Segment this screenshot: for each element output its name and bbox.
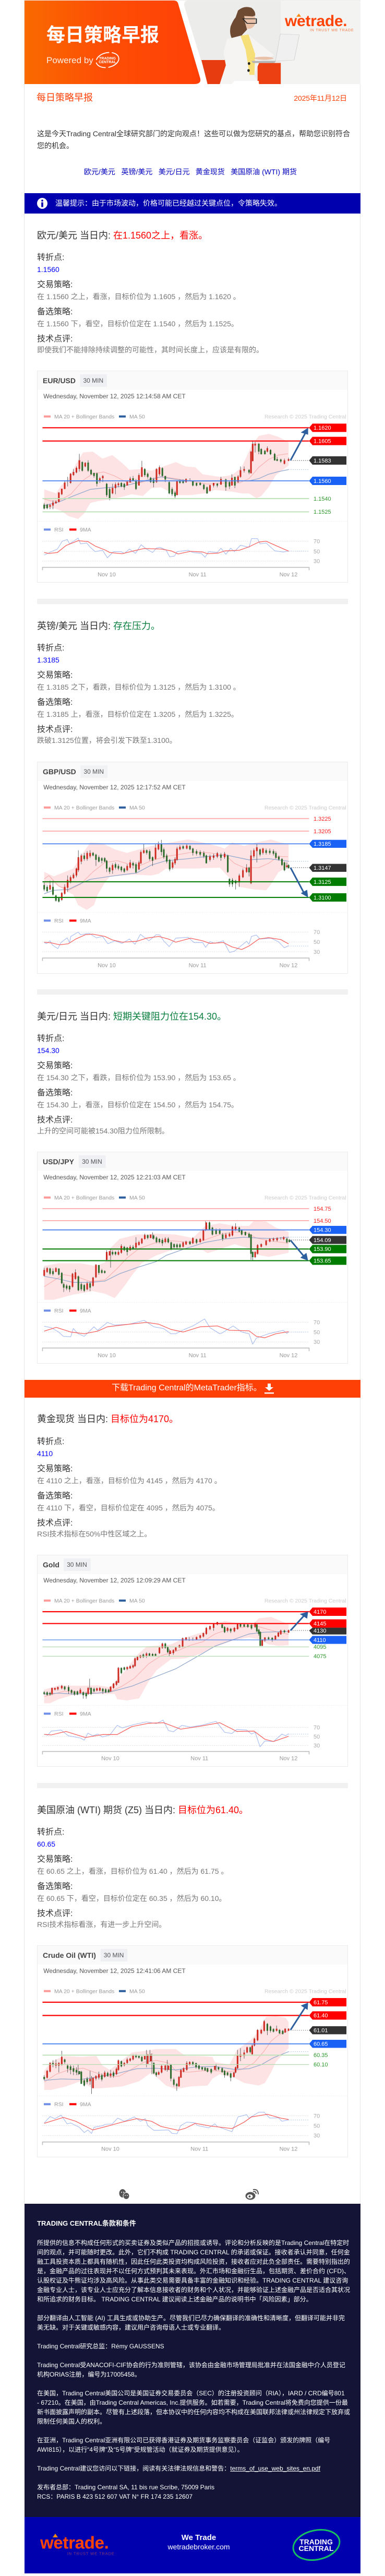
US note: 在美国，Trading Central美国公司是美国证券交易委员会（SEC）的注册投资顾问（RIA），IARD / CRD编号801 [37,2390,345,2397]
section: EUR/USD: 欧元/美元 当日内: 在1.1560之上，看涨。 [37,230,208,241]
logo: Trading Central in banner [95,51,120,69]
price level labels: 61.75 [314,2000,328,2006]
price level labels: 1.1605 [314,439,331,445]
section: WTI crude: 转折点: [37,1828,64,1837]
price level labels: 1.3205 [314,829,331,835]
disclaimer paragraph: 认股权证及牛熊证均涉及高风险。从事此类交易需要具备丰富的金融知识和经验。TRADING CENTRAL 建议咨询 [37,2277,348,2284]
RSI panel: 70 [314,1320,320,1326]
logo: wetrade footer: IN TRUST WE TRADE [67,2551,115,2556]
icon: download arrow [264,1384,274,1394]
section: USD/JPY [37,1011,348,1364]
chart header [38,1555,347,1584]
section: USD/JPY: 154.30 [37,1046,59,1055]
price legend [44,413,346,420]
logo: wetrade in banner: IN TRUST WE TRADE [310,29,354,32]
chart: Gold [37,1555,348,1767]
section: GBP/USD: 1.3185 [37,656,59,664]
chart header: EUR/USD [43,376,76,385]
RSI panel: 50 [314,2123,320,2130]
price level labels: 1.3225 [314,816,331,822]
chart header: 30 MIN [83,768,104,775]
section: WTI crude: RSI技术指标看涨，有进一步上升空间。 [37,1920,166,1929]
section: USD/JPY: 转折点: [37,1034,64,1043]
section: USD/JPY: 交易策略: [37,1061,73,1070]
logo: wetrade footer: wetrade. [40,2533,109,2552]
section: USD/JPY: 上升的空间可能被154.30阻力位所限制。 [37,1127,169,1135]
logo: Trading Central footer: TRADING [299,2537,333,2546]
section: GBP/USD: 英镑/美元 当日内: 存在压力。 [37,621,160,631]
chart header: Wednesday, November 12, 2025 12:41:06 AM CET [43,1967,186,1975]
section: Gold: 技术点评: [37,1519,73,1528]
price legend: Research © 2025 Trading Central [264,1598,346,1604]
dark legal footer [25,2204,360,2517]
chart header: 30 MIN [82,1158,102,1165]
download bar: 下载Trading Central的MetaTrader指标。 [112,1384,262,1392]
price level labels [314,816,331,901]
RSI panel: 9MA [80,527,91,533]
banner photo: woman with laptop [184,1,360,84]
powered by: Powered by [46,55,93,65]
report title: 每日策略早报 [37,92,93,103]
price level labels [314,425,331,515]
publisher address [37,2484,214,2500]
section: EUR/USD: 备选策略: [37,308,73,316]
price level labels: 4095 [314,1644,326,1650]
RSI panel: Nov 10 [98,572,116,578]
instrument links [84,168,297,176]
price level labels: 1.1583 [314,458,331,464]
logo: wetrade in banner: wetrade. [284,13,347,30]
section: GBP/USD [37,621,348,974]
RSI panel: Nov 12 [280,1756,297,1762]
logo: Trading Central footer: CENTRAL [299,2544,334,2553]
section: Gold: 备选策略: [37,1492,73,1500]
section: EUR/USD: 转折点: [37,253,64,262]
brand name and website: We Trade [182,2533,216,2542]
RSI panel: 9MA [80,1308,91,1314]
price legend [44,1195,346,1201]
RSI panel [38,1303,347,1359]
section: GBP/USD: 在 1.3185 之下，看跌，目标价位为 1.3125 ，然后为 1.3100 。 [37,683,240,691]
logo: Trading Central in banner: CENTRAL [99,61,116,64]
section: Gold: 黄金现货 当日内: 目标位为4170。 [37,1414,178,1424]
icon: weibo [245,2189,259,2200]
price plot [42,1209,346,1300]
price level labels: 4110 [314,1637,326,1644]
RSI panel: 9MA [80,918,91,924]
price legend: MA 50 [129,1598,145,1604]
chart header: Gold [43,1561,59,1569]
price level labels: 4170 [314,1609,326,1615]
section: EUR/USD: 即使我们不能排除持续调整的可能性，其时间长度上，应该是有限的。 [37,346,263,354]
price level labels [314,1609,326,1660]
price level labels: 1.1560 [314,478,331,485]
RSI panel: Nov 12 [280,572,297,578]
section: WTI crude: 60.65 [37,1840,55,1848]
price legend [44,805,346,811]
section: GBP/USD: 转折点: [37,644,64,653]
price legend: MA 50 [129,1989,145,1995]
price legend: MA 20 + Bollinger Bands [54,1598,114,1604]
instrument links: 黄金现货 [196,168,225,176]
chart: Crude Oil WTI [37,1945,348,2157]
disclaimer paragraph: 是，金融产品的过往表现并不以任何方式预判其未来表现。外汇市场和金融衍生品，包括期货、差价合约 (CFD)、 [37,2267,350,2275]
section: USD/JPY: 技术点评: [37,1116,73,1125]
price level labels: 154.50 [314,1218,331,1224]
price legend: MA 20 + Bollinger Bands [54,1989,114,1995]
RSI panel: Nov 12 [280,1353,297,1359]
regulatory note [37,2361,345,2378]
RSI panel: 50 [314,939,320,946]
chart header: 30 MIN [67,1561,87,1568]
section: WTI crude: 交易策略: [37,1855,73,1864]
Asia note [37,2437,330,2453]
section: WTI crude: 在 60.65 之上，看涨，目标价位为 61.40 ，然后为 61.75 。 [37,1867,228,1875]
publisher address: RCS：PARIS B 423 512 607 VAT N° FR 174 235 12607 [37,2493,192,2500]
price level labels: 1.1525 [314,509,331,515]
price level labels: 60.65 [314,2041,328,2048]
price legend: Research © 2025 Trading Central [264,1989,346,1995]
price legend: MA 50 [129,413,145,420]
RSI panel [38,912,347,968]
RSI panel: 9MA [80,1711,91,1717]
RSI panel: Nov 12 [280,2146,297,2153]
price legend: MA 50 [129,805,145,811]
chart header [38,371,347,400]
chart header: Wednesday, November 12, 2025 12:21:03 AM CET [43,1174,186,1181]
section: GBP/USD: 技术点评: [37,725,73,734]
RSI panel [38,2096,347,2153]
section: GBP/USD: 交易策略: [37,671,73,680]
section: EUR/USD: 1.1560 [37,265,59,274]
brand name and website [167,2533,230,2551]
RSI panel: RSI [54,918,64,924]
price plot [42,1998,346,2094]
price level labels: 60.35 [314,2052,328,2059]
section: USD/JPY: 在 154.30 之下，看跌，目标价位为 153.90 ，然后为 153.65 。 [37,1073,240,1082]
brand name and website: wetradebroker.com [167,2543,230,2551]
RSI panel: Nov 11 [189,962,207,968]
AI translation note [37,2314,345,2331]
RSI panel: Nov 12 [280,962,297,968]
price plot [42,423,346,519]
disclaimer paragraph: 金融专业人士，该专业人士应充分了解本信息接收者的财务和个人状况，并能够验证上述金融产品是否适合其状况 [37,2286,350,2294]
price plot [42,819,346,910]
chart header [38,1152,347,1181]
RSI panel: Nov 11 [189,572,207,578]
US note: 新书面披露声明的副本。尽管有上述段落，但本协议中的任何内容均不构成在美国联邦法律或州法律规定下放弃或 [37,2408,350,2416]
section: Gold: 交易策略: [37,1464,73,1473]
section: WTI crude: 技术点评: [37,1909,73,1918]
disclaimer paragraph: 所提供的信息不构成任何形式的买卖证券及类似产品的招揽或诱导。评论和分析反映的是Trading Central在特定时 [37,2239,349,2247]
RSI panel: Nov 10 [101,2146,119,2153]
price level labels: 1.3185 [314,841,331,847]
section: USD/JPY: 美元/日元 当日内: 短期关键阻力位在154.30。 [37,1011,226,1022]
notice bar: 温馨提示：由于市场波动，价格可能已经越过关键点位，令策略失效。 [55,199,282,207]
price level labels: 1.3100 [314,895,331,901]
price level labels [314,1206,331,1265]
RSI panel [38,521,347,578]
banner title: 每日策略早报 [46,24,159,45]
US note: 限制任何美国人的权利。 [37,2418,106,2425]
chart header: Crude Oil (WTI) [43,1951,96,1959]
RSI panel: 30 [314,1339,320,1345]
RSI panel: Nov 10 [98,1353,116,1359]
download bar [25,1380,360,1398]
RSI panel [38,1706,347,1762]
AI translation note: 美无缺。对于关键或敏感内容，建议用户咨询母语人士或专业翻译。 [37,2324,225,2331]
price legend [44,1598,346,1604]
regulatory note: 机构ORIAS注册，编号为17005458。 [37,2371,141,2378]
price level labels: 154.75 [314,1206,331,1212]
logo: Trading Central footer [291,2526,342,2564]
chart: USD/JPY [37,1152,348,1364]
price level labels: 1.1540 [314,496,331,502]
section: GBP/USD: 在 1.3185 上，看涨，目标价位定在 1.3205 ，然后为 1.3225。 [37,710,238,718]
logo: Trading Central in banner: TRADING [99,57,116,61]
icon: wechat [119,2189,129,2199]
instrument links: 英镑/美元 [121,168,152,176]
section: Gold: 在 4110 之上，看涨，目标价位为 4145 ，然后为 4170 。 [37,1476,222,1485]
RSI panel: 70 [314,539,320,545]
US note [37,2390,350,2425]
instrument links: 美国原油 (WTI) 期货 [231,168,297,176]
research director: Trading Central研究总监：Rémy GAUSSENS [37,2343,164,2350]
price level labels: 61.40 [314,2013,328,2019]
Asia note: AWI815），以进行“4号牌”及“5号牌”受规管活动（就证券及期货提供意见）。 [37,2446,244,2453]
disclaimer paragraph: 融工具投资本质上都具有随机性，因此任何此类投资均构成风险投资，接收者应对此负全部责任。需要特别指出的 [37,2258,350,2265]
RSI panel: 50 [314,1734,320,1740]
regulatory note: Trading Central受ANACOFI-CIF协会的行为准则管辖，该协会由金融市场管理局批准并在法国金融中介人员登记 [37,2361,345,2369]
terms heading: TRADING CENTRAL条款和条件 [37,2219,136,2227]
disclaimer paragraph: 间的观点，并可能随时更改。此外，它们不构成 TRADING CENTRAL 的承诺或保证。接收者承认并同意，任何金 [37,2249,350,2256]
chart header: 30 MIN [83,377,103,384]
instrument links: 欧元/美元 [84,168,115,176]
RSI panel: RSI [54,2101,64,2108]
section: Gold: RSI技术指标在50%中性区域之上。 [37,1530,151,1538]
RSI panel: Nov 11 [190,1756,208,1762]
section: Gold: 转折点: [37,1437,64,1446]
price level labels: 153.65 [314,1258,331,1265]
section: EUR/USD [37,230,348,583]
RSI panel: RSI [54,1308,64,1314]
notice bar [25,193,360,214]
section: EUR/USD: 在 1.1560 下，看空，目标价位定在 1.1540 ，然后为 1.1525。 [37,320,238,328]
section: Gold: 4110 [37,1449,53,1458]
chart header: Wednesday, November 12, 2025 12:14:58 AM CET [43,393,186,400]
RSI panel: Nov 11 [189,1353,207,1359]
chart header [38,762,347,791]
price level labels: 1.3125 [314,879,331,885]
RSI panel: 70 [314,929,320,936]
card side borders [24,0,360,2204]
RSI panel: Nov 11 [190,2146,208,2153]
RSI panel: RSI [54,1711,64,1717]
section: Gold: 在 4110 下，看空，目标价位定在 4095 ，然后为 4075。 [37,1504,220,1512]
section: EUR/USD: 在 1.1560 之上，看涨，目标价位为 1.1605 ，然后为 1.1620 。 [37,292,240,301]
price legend: MA 20 + Bollinger Bands [54,805,114,811]
price level labels: 154.30 [314,1227,331,1234]
hero banner [25,1,360,84]
divider bar [37,599,348,604]
price legend: Research © 2025 Trading Central [264,413,346,420]
price legend: MA 20 + Bollinger Bands [54,1195,114,1201]
blue brand footer [25,2517,360,2573]
RSI panel: Nov 10 [101,1756,119,1762]
price level labels: 1.3147 [314,865,331,871]
RSI panel: 30 [314,2133,320,2139]
price legend: MA 50 [129,1195,145,1201]
intro paragraph: 您的机会。 [37,141,74,149]
section: Gold [37,1414,348,1767]
section: WTI crude [37,1805,348,2157]
chart header: 30 MIN [104,1952,124,1959]
section: GBP/USD: 跌破1.3125位置，将会引发下跌至1.3100。 [37,736,177,745]
report date: 2025年11月12日 [294,94,347,102]
price legend: Research © 2025 Trading Central [264,1195,346,1201]
divider bar [37,1783,348,1788]
price level labels: 154.09 [314,1237,331,1244]
price level labels: 4075 [314,1653,326,1660]
disclaimer paragraph [37,2239,350,2303]
banner orange panel [25,1,200,84]
legal link: Trading Central建议您访问以下链接，阅读有关法律法规信息和警告：terms_of_use_web_sites_en.pdf [37,2465,320,2472]
price level labels: 61.01 [314,2028,328,2034]
RSI panel: 9MA [80,2101,91,2108]
price level labels: 153.90 [314,1246,331,1252]
disclaimer paragraph: 和所追求的财务目标。 TRADING CENTRAL 建议阅读上述金融产品的说明书中「风险因素」部分。 [37,2296,312,2303]
section: EUR/USD: 技术点评: [37,335,73,344]
price legend: Research © 2025 Trading Central [264,805,346,811]
RSI panel: 70 [314,1725,320,1731]
price level labels: 4130 [314,1628,326,1634]
chart header [38,1946,347,1975]
price legend [44,1989,346,1995]
divider bar [37,989,348,995]
section: WTI crude: 美国原油 (WTI) 期货 (Z5) 当日内: 目标位为61.40。 [37,1805,248,1815]
section: WTI crude: 在 60.65 下，看空，目标价位定在 60.35 ，然后为 60.10。 [37,1894,226,1903]
chart header: USD/JPY [43,1157,75,1166]
section: USD/JPY: 备选策略: [37,1089,73,1097]
publisher address: 发布者总部：Trading Central SA, 11 bis rue Scribe, 75009 Paris [37,2484,214,2491]
chart header: Wednesday, November 12, 2025 12:09:29 AM CET [43,1577,186,1584]
section: WTI crude: 备选策略: [37,1882,73,1891]
price level labels: 4145 [314,1621,326,1627]
RSI panel: 50 [314,1330,320,1336]
RSI panel: Nov 10 [98,962,116,968]
section: EUR/USD: 交易策略: [37,280,73,289]
RSI panel: 70 [314,2113,320,2120]
chart header: GBP/USD [43,767,76,776]
RSI panel: RSI [54,527,64,533]
price legend: MA 20 + Bollinger Bands [54,413,114,420]
section: USD/JPY: 在 154.30 上，看涨，目标价位定在 154.50 ，然后为 154.75。 [37,1101,238,1109]
intro paragraph: 这是今天Trading Central全球研究部门的定向观点！这些可以做为您研究的基点，帮助您识别符合 [37,129,350,138]
chart: GBP/USD [37,762,348,974]
RSI panel: 30 [314,949,320,955]
RSI panel: 30 [314,559,320,565]
Asia note: 在亚洲，Trading Central亚洲有限公司已获得香港证券及期货事务监察委员会（证监会）颁发的牌照（编号 [37,2437,330,2444]
price level labels [314,2000,328,2068]
US note: - 67210。在美国，由Trading Central Americas, Inc.提供服务。如若需要，Trading Central将免费向您提供一份最 [37,2399,348,2406]
price level labels: 60.10 [314,2062,328,2068]
RSI panel: 30 [314,1743,320,1749]
RSI panel: 50 [314,549,320,555]
intro paragraph [37,129,350,149]
chart header: Wednesday, November 12, 2025 12:17:52 AM CET [43,784,186,791]
price level labels: 1.1620 [314,425,331,431]
price plot [42,1608,346,1704]
instrument links: 美元/日元 [159,168,190,176]
section: GBP/USD: 备选策略: [37,698,73,707]
chart: EUR/USD [37,371,348,583]
AI translation note: 部分翻译由人工智能 (AI) 工具生成或协助生产。尽管我们已尽力确保翻译的准确性和清晰度，但翻译可能并非完 [37,2314,345,2322]
